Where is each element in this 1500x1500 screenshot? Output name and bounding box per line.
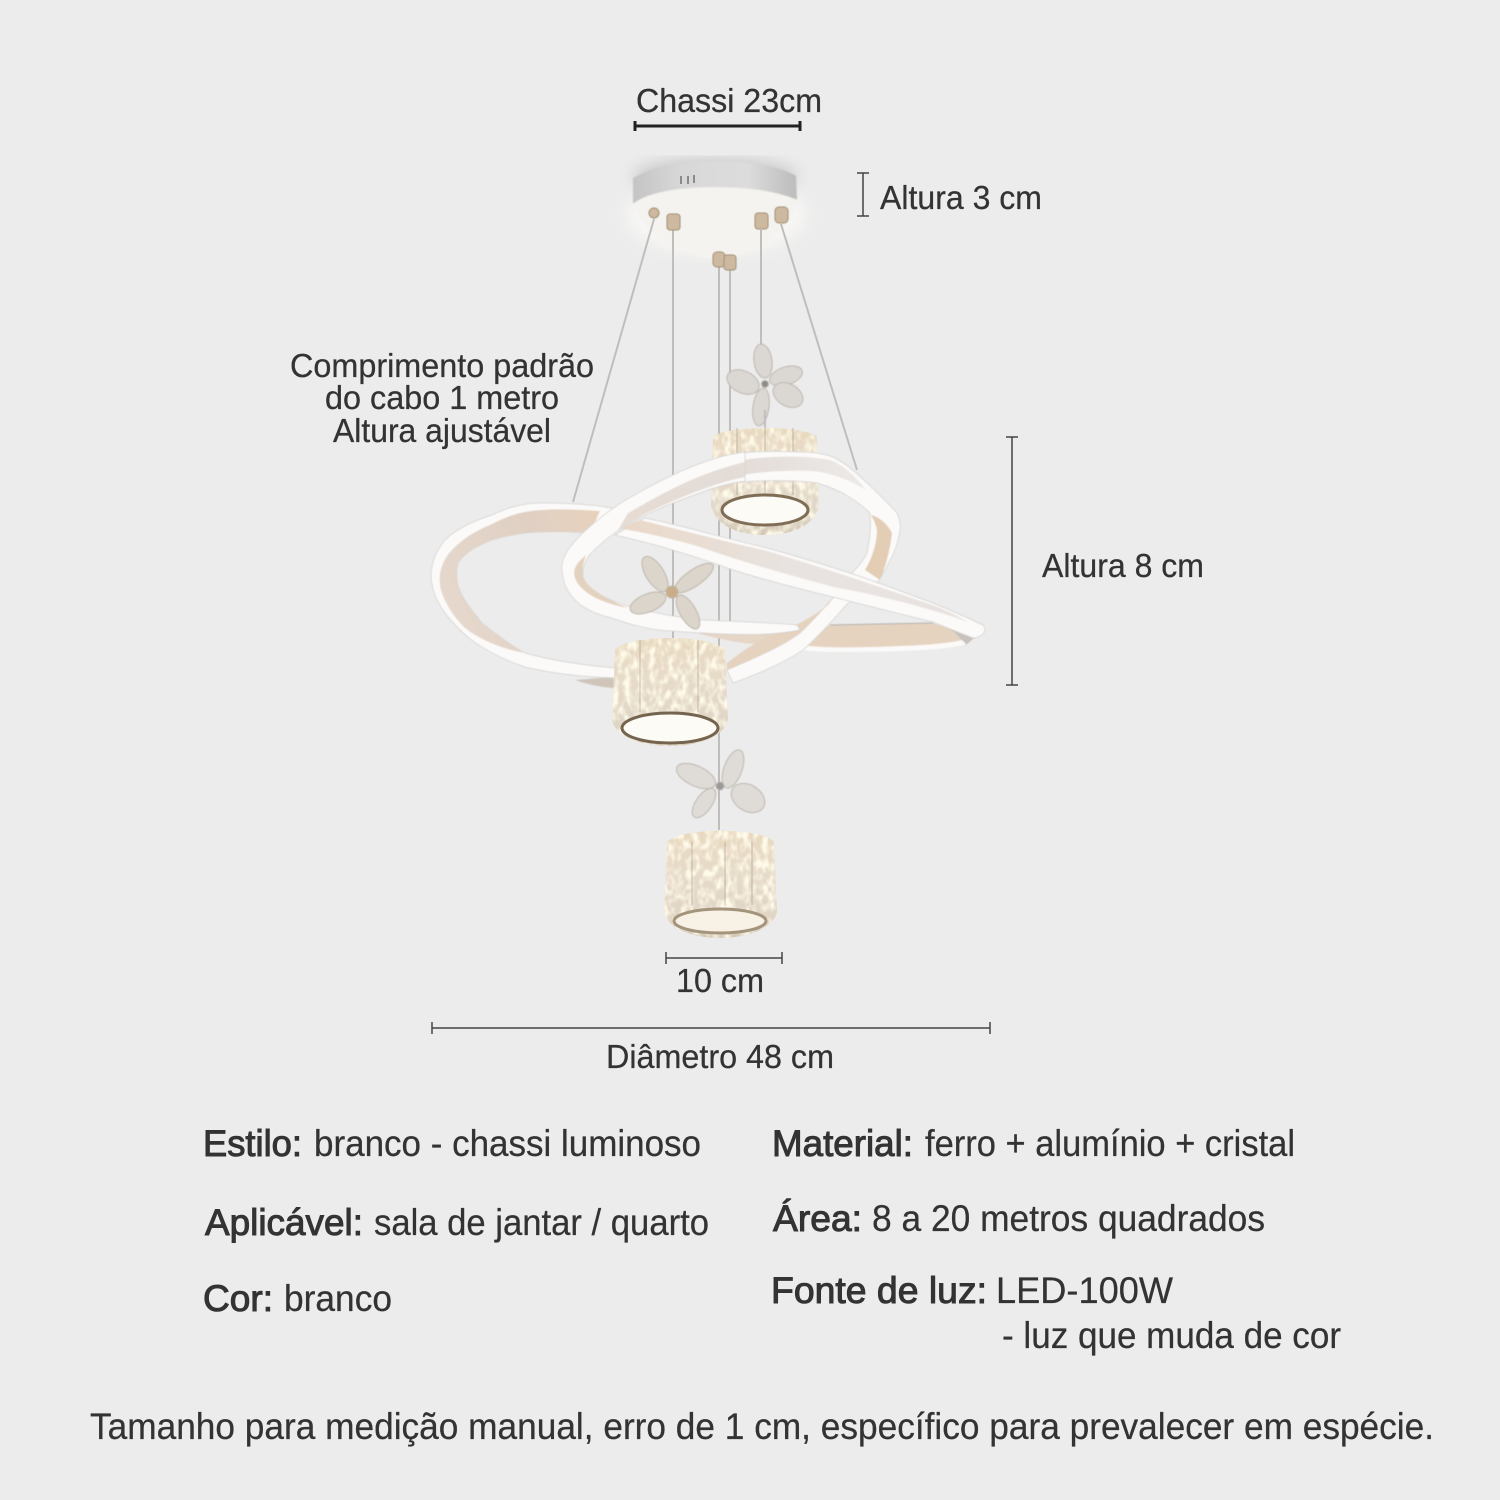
cable length note: Altura ajustável (333, 412, 551, 449)
cable length note: Comprimento padrão (290, 347, 594, 384)
crystal flower: bottom (673, 747, 770, 822)
dimension: diameter: Diâmetro 48 cm (606, 1038, 834, 1075)
spec: applicable: sala de jantar / quarto (374, 1202, 709, 1243)
dimension: lantern width: 10 cm (676, 962, 764, 999)
ribbon: lower right sweep (700, 622, 983, 652)
ribbon: diagonal band to tip (615, 518, 985, 638)
dimension: ring height (1006, 437, 1204, 685)
spec: light source: Fonte de luz: (771, 1270, 987, 1311)
spec: colour (203, 1278, 392, 1319)
spec: applicable (205, 1202, 709, 1243)
spec: material (772, 1123, 1295, 1164)
spec: area: 8 a 20 metros quadrados (872, 1198, 1265, 1239)
spec: area: Área: (773, 1198, 862, 1239)
dimension: lantern width (666, 952, 782, 999)
dimension: diameter (432, 1022, 990, 1075)
spec: material: Material: (772, 1123, 913, 1164)
spec: material: ferro + alumínio + cristal (925, 1123, 1295, 1164)
pendant lantern: middle (612, 638, 728, 746)
spec: applicable: Aplicável: (205, 1202, 363, 1243)
crystal flower: middle (627, 552, 717, 632)
spec: colour: Cor: (203, 1278, 273, 1319)
spec: style: branco - chassi luminoso (314, 1123, 701, 1164)
dimension: ring height: Altura 8 cm (1042, 547, 1204, 584)
ribbon: left loop (431, 503, 616, 688)
spec: style: Estilo: (203, 1123, 302, 1164)
dimension: chassis width: Chassi 23cm (636, 82, 822, 119)
lamp illustration (431, 159, 985, 943)
spec: colour: branco (284, 1278, 392, 1319)
footnote: Tamanho para medição manual, erro de 1 cm, específico para prevalecer em espécie. (90, 1406, 1434, 1447)
spec: light source: - luz que muda de cor (1002, 1315, 1341, 1356)
pendant lantern: top (711, 428, 819, 535)
ceiling canopy (626, 159, 806, 258)
crystal flower: top (723, 343, 807, 428)
spec: light source: LED-100W (996, 1270, 1173, 1311)
suspension cables (573, 219, 857, 830)
pendant lantern: bottom (664, 830, 777, 938)
spec: light source (771, 1270, 1341, 1356)
ribbon: top loop right side (720, 451, 900, 683)
dimension: chassis height: Altura 3 cm (880, 179, 1042, 216)
cable length note (290, 347, 594, 449)
cable length note: do cabo 1 metro (325, 379, 559, 416)
ribbon: top loop left side (562, 452, 800, 635)
cable mounts (649, 207, 788, 270)
